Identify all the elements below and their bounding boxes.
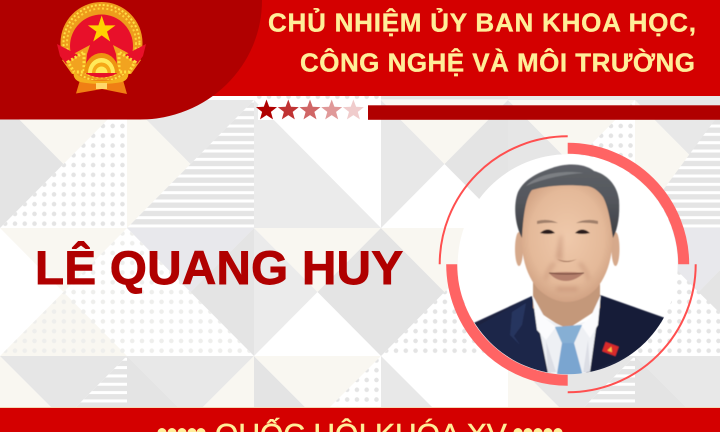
- title: [268, 7, 696, 78]
- nose: [557, 259, 577, 262]
- gear: [84, 53, 119, 73]
- face shading: [544, 235, 590, 291]
- lower wreath right: [113, 45, 141, 74]
- ears: [515, 232, 523, 266]
- banner: [74, 71, 128, 84]
- wreath ring: [60, 2, 142, 84]
- jacket: [474, 295, 664, 373]
- divider bar with stars: [256, 100, 720, 120]
- lower wreath left: [62, 45, 90, 74]
- thin ring arcs: [440, 136, 696, 392]
- red ribbons: [57, 44, 78, 64]
- banner tail: [76, 80, 127, 94]
- portrait frame: [440, 136, 696, 392]
- tie: [556, 325, 583, 374]
- parliament pin: [602, 342, 619, 356]
- shirt collar: [532, 295, 601, 373]
- face: [521, 185, 613, 302]
- footer dots: [158, 428, 562, 432]
- title: CHỦ NHIỆM ỦY BAN KHOA HỌC,: [268, 7, 696, 38]
- red field: [70, 14, 133, 78]
- top red banner: [0, 0, 720, 96]
- dark red corner panel: [0, 0, 262, 120]
- eyes: [540, 230, 555, 234]
- mouth: [549, 272, 584, 281]
- title: CÔNG NGHỆ VÀ MÔI TRƯỜNG: [300, 48, 695, 78]
- portrait photo: [474, 164, 664, 374]
- hair: [515, 165, 619, 238]
- thick ring arcs: [452, 148, 684, 380]
- gold star: [88, 16, 116, 42]
- national emblem: [57, 2, 146, 94]
- rating stars: [256, 100, 364, 119]
- white disc: [458, 154, 678, 374]
- bottom banner: [0, 407, 720, 432]
- eyebrows: [537, 220, 558, 224]
- name heading: LÊ QUANG HUY: [35, 240, 403, 295]
- neck: [533, 280, 600, 330]
- hair highlight: [526, 172, 584, 186]
